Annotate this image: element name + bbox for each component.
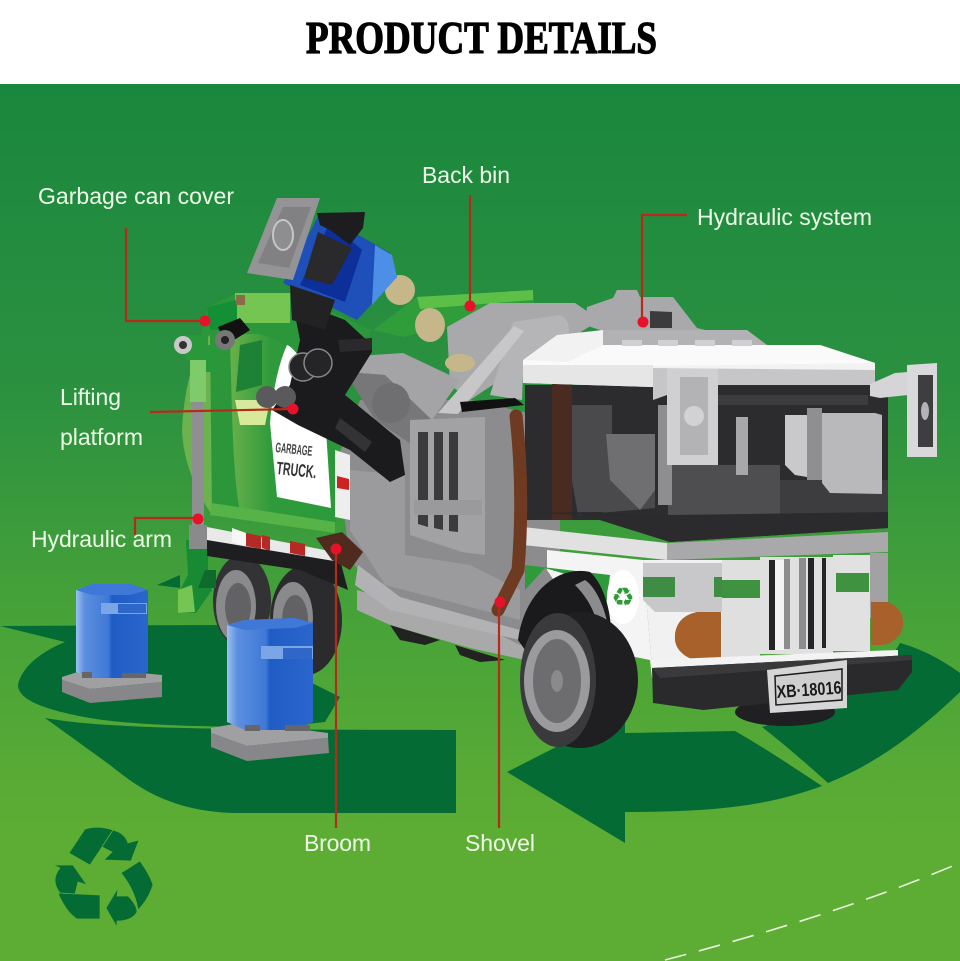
hidden right wheel [735,698,835,726]
sticker word: TRUCK. [276,458,317,482]
callout: shovel [465,596,535,856]
broom [316,532,363,570]
lifting arm [256,300,405,482]
tan connectors [385,275,475,372]
bumper [652,655,912,710]
callout: shovel: Shovel [465,830,535,856]
callout: back bin [422,162,510,312]
callout: garbage can cover [38,183,234,326]
license plate [767,660,847,713]
plate number: XB·18016 [776,678,842,702]
recycle badge: ♻ [611,583,635,613]
grey body [337,400,560,645]
callout: lifting platform: Lifting [60,384,121,410]
front pillar and roof sign [653,368,875,465]
wheel arch [518,571,611,655]
rear wheels [213,555,342,675]
callout: broom: Broom [304,830,371,856]
lower white front [650,650,898,678]
roof [523,330,875,387]
grille guard [410,417,485,555]
recycle badge [607,570,639,624]
callout: lifting platform: platform [60,424,143,450]
garbage truck [174,198,937,748]
dash [523,512,888,542]
red and white stripe [207,527,340,562]
callout: hydraulic system [638,204,872,328]
shovel rail [460,398,524,412]
grey plate [247,198,320,280]
front wheel [520,612,638,748]
undercarriage [207,540,348,590]
title band [0,0,960,84]
callout: back bin: Back bin [422,162,510,188]
hydraulic arm [174,330,235,549]
callout: hydraulic system: Hydraulic system [697,204,872,230]
warning decals [335,450,350,520]
recycling icon [53,827,153,927]
grey hopper and cab rear block [343,303,600,450]
sticker text: GARBAGE [275,439,313,459]
mirror [870,363,937,457]
green tank and body [182,293,372,533]
callout: broom [304,544,371,856]
top vent [585,290,767,345]
callout: garbage can cover: Garbage can cover [38,183,234,209]
shovel pipe [498,416,521,610]
roof studs [622,340,752,346]
callout: lifting platform [60,384,298,450]
rear green strut foot [178,540,212,613]
grille [760,557,833,654]
large blue bin [211,618,329,761]
small blue bin [62,584,162,703]
green fender stripe [525,565,610,630]
white side stripe [523,527,667,560]
back bin [373,290,535,337]
label sticker [270,345,331,508]
title: PRODUCT DETAILS [306,13,657,63]
front lights glass [643,563,722,612]
windows [525,385,888,520]
cab [518,290,937,678]
recycling swoosh background [0,575,960,843]
dashed road line [665,865,955,960]
front panels [722,560,760,658]
headlamps [675,602,903,660]
callout: hydraulic arm: Hydraulic arm [31,526,172,552]
lifted blue bin [247,198,397,330]
side panel white [547,550,687,670]
callout: hydraulic arm [31,514,204,552]
